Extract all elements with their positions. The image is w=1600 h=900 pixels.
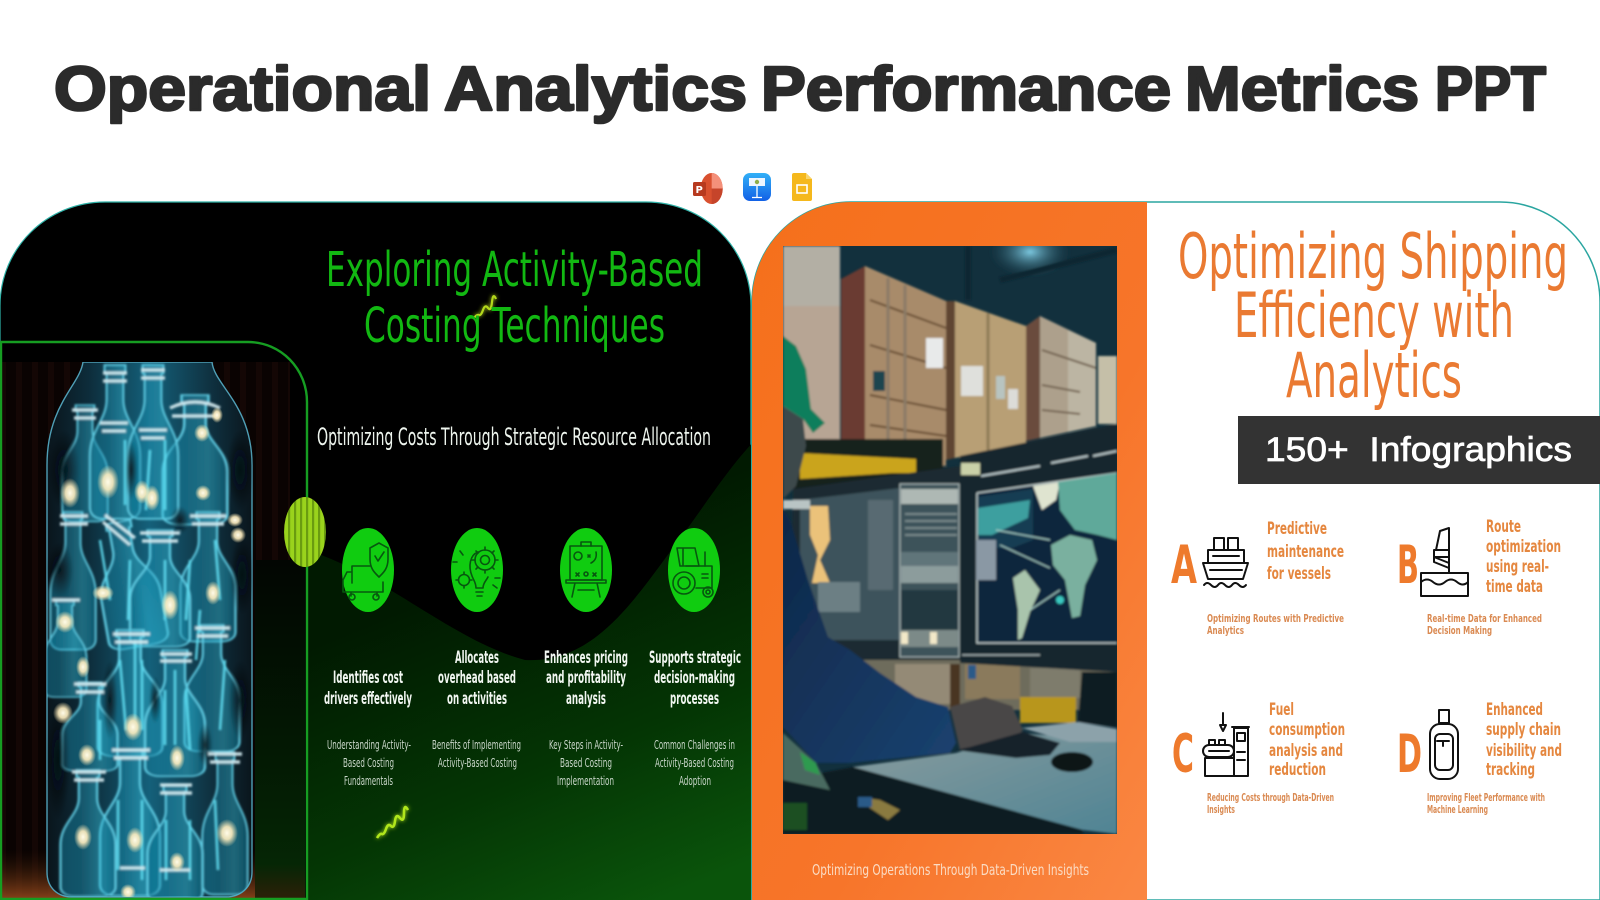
caption: Optimizing Operations Through Data-Driven Insights [812, 861, 1089, 879]
title: PPT [1435, 55, 1546, 124]
item B: Decision Making [1427, 625, 1492, 637]
item A: Predictive [1267, 519, 1327, 538]
item D: D [1397, 724, 1422, 785]
column 3: and profitability [546, 668, 626, 687]
item B [1397, 517, 1561, 637]
column 1 [324, 528, 412, 788]
dark gaps between bottles [46, 430, 254, 820]
item B: B [1397, 535, 1419, 596]
icon: truck with shield [342, 528, 394, 612]
column 4: Supports strategic [649, 648, 741, 667]
icon: bulb with gears [451, 528, 503, 612]
item B: time data [1486, 577, 1543, 596]
below monitors blurred background [850, 660, 1117, 710]
column 4 [649, 528, 741, 788]
item B: Route [1486, 517, 1521, 536]
item B: optimization [1486, 537, 1561, 556]
icon: fuel bottle [1430, 710, 1458, 779]
zigzag accent bottom [377, 807, 408, 838]
item C: Insights [1207, 804, 1235, 816]
item C: Fuel [1269, 700, 1294, 719]
item C [1172, 700, 1345, 816]
title: Metrics [1185, 55, 1419, 124]
icon: Google Slides [792, 173, 812, 201]
column 2: Allocates [455, 648, 499, 667]
column 3 [544, 528, 628, 788]
icon: buoy [1421, 528, 1468, 596]
containers [865, 266, 946, 466]
right monitor [960, 424, 1117, 672]
item D: Enhanced [1486, 700, 1543, 719]
left monitor [790, 466, 960, 660]
column 2: Activity-Based Costing [438, 755, 517, 770]
column 2: overhead based [438, 668, 516, 687]
column 1: Fundamentals [344, 773, 393, 788]
column 3: Implementation [557, 773, 614, 788]
item A: Optimizing Routes with Predictive [1207, 613, 1344, 625]
item D: tracking [1486, 760, 1535, 779]
orange side panel [752, 202, 1147, 900]
column 3: Enhances pricing [544, 648, 628, 667]
title: Operational [54, 55, 431, 124]
icon: ship [1203, 538, 1248, 587]
heading: Exploring Activity-Based [326, 242, 703, 298]
column 3: Key Steps in Activity- [549, 737, 623, 752]
desk surface [853, 733, 1117, 834]
column 3: Based Costing [560, 755, 612, 770]
image frame: glass bottles [0, 342, 308, 900]
zigzag accent top [474, 296, 496, 318]
item C: C [1172, 724, 1194, 785]
subheading: Optimizing Costs Through Strategic Resource Allocation [317, 423, 711, 451]
item A: for vessels [1267, 564, 1331, 583]
yellow pallet [783, 439, 943, 489]
column 1: Based Costing [343, 755, 394, 770]
icon: PowerPoint: P [696, 185, 703, 196]
photo: operator at monitors in warehouse [783, 226, 1117, 834]
green gradient hill [300, 435, 760, 900]
item A [1171, 519, 1344, 637]
banner: 150+ Infographics: 150+ Infographics [1265, 431, 1572, 469]
column 2 [432, 528, 521, 770]
item C: reduction [1269, 760, 1326, 779]
banner: 150+ Infographics [1238, 416, 1600, 484]
item A: A [1171, 535, 1197, 596]
column 4: Adoption [679, 773, 711, 788]
title: Performance [761, 55, 1171, 124]
worker [783, 509, 956, 763]
column 3: analysis [566, 689, 606, 708]
item C: analysis and [1269, 741, 1343, 760]
column 1: Understanding Activity- [327, 737, 411, 752]
column 4: Common Challenges in [654, 737, 735, 752]
column 1: drivers effectively [324, 689, 412, 708]
icon: Keynote [743, 173, 771, 201]
heading: Costing Techniques [364, 298, 665, 354]
column 2: on activities [447, 689, 507, 708]
title: Analytics [444, 55, 747, 124]
item A: Analytics [1207, 625, 1244, 637]
chair [783, 733, 830, 790]
ceiling light and beams [996, 246, 1067, 276]
column 4: processes [670, 689, 719, 708]
monitor stand [1078, 672, 1117, 727]
icon: PowerPoint [693, 173, 723, 204]
item C: Reducing Costs through Data-Driven [1207, 792, 1334, 804]
item B: Real-time Data for Enhanced [1427, 613, 1542, 625]
item C: consumption [1269, 720, 1345, 739]
heading: Analytics [1286, 339, 1462, 412]
keyboard and mouse [956, 732, 1060, 758]
item A: maintenance [1267, 542, 1344, 561]
heading [326, 242, 703, 354]
item D [1397, 700, 1562, 816]
column 4: decision-making [654, 668, 735, 687]
column 1: Identifies cost [333, 668, 403, 687]
panel: shipping efficiency slide [752, 202, 1600, 900]
column 2: Benefits of Implementing [432, 737, 521, 752]
item D: Machine Learning [1427, 804, 1488, 816]
icon: tractor [668, 528, 720, 612]
column 4: Activity-Based Costing [655, 755, 734, 770]
icon: factory machine [1203, 713, 1249, 776]
panel: activity-based costing slide [0, 202, 760, 900]
heading [1178, 220, 1568, 412]
icon: strategy board [560, 528, 612, 612]
item D: supply chain [1486, 720, 1561, 739]
decorative striped ellipse [284, 497, 326, 567]
title [54, 55, 1546, 124]
item B: using real- [1486, 557, 1549, 576]
